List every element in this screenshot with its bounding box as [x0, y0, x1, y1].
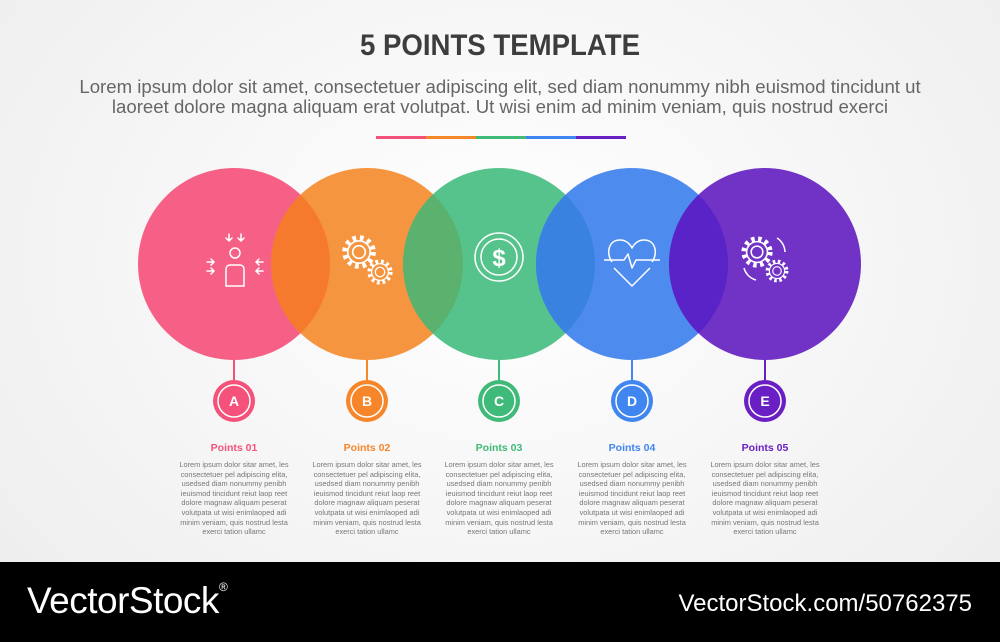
text column 5: Lorem ipsum dolor sitar amet, les consectetuer pel adipiscing elita, usedsed diam nonummy penibh ieuismod tincidunt reiut laop reet dolore magnaw aliquam peserat volutpata ut wisi enimlaoped adi minim veniam, quis nostrud lesta exerci tation ullamc — [710, 460, 820, 536]
text column 4: Points 04 — [609, 442, 655, 454]
circle 4 — [536, 168, 728, 360]
text column 1: Lorem ipsum dolor sitar amet, les consectetuer pel adipiscing elita, usedsed diam nonummy penibh ieuismod tincidunt reiut laop reet dolore magnaw aliquam peserat volutpata ut wisi enimlaoped adi minim veniam, quis nostrud lesta exerci tation ullamc — [179, 460, 289, 536]
title: 5 POINTS TEMPLATE — [360, 29, 640, 62]
badge B — [346, 380, 388, 422]
circle 5 — [669, 168, 861, 360]
text column 5: Points 05 — [742, 442, 788, 454]
badge E: E — [760, 393, 770, 409]
circle 1 — [138, 168, 330, 360]
footer: VectorStock® — [27, 580, 227, 621]
text column 2: Points 02 — [344, 442, 390, 454]
icon: person with arrows — [207, 234, 263, 286]
text column 3: Lorem ipsum dolor sitar amet, les consectetuer pel adipiscing elita, usedsed diam nonummy penibh ieuismod tincidunt reiut laop reet dolore magnaw aliquam peserat volutpata ut wisi enimlaoped adi minim veniam, quis nostrud lesta exerci tation ullamc — [444, 460, 554, 536]
badge D: D — [627, 393, 637, 409]
badge B: B — [362, 393, 372, 409]
icon: heart pulse — [604, 240, 660, 286]
text column 1: Points 01 — [211, 442, 257, 454]
icon: dollar coin — [475, 233, 523, 281]
subtitle: Lorem ipsum dolor sit amet, consectetuer adipiscing elit, sed diam nonummy nibh euismod tincidunt ut — [79, 76, 921, 97]
subtitle — [79, 76, 921, 117]
footer — [0, 562, 1000, 642]
badge C: C — [494, 393, 504, 409]
badge A — [213, 380, 255, 422]
overlaps — [271, 194, 728, 334]
circle 3 — [403, 168, 595, 360]
text column 4: Lorem ipsum dolor sitar amet, les consectetuer pel adipiscing elita, usedsed diam nonummy penibh ieuismod tincidunt reiut laop reet dolore magnaw aliquam peserat volutpata ut wisi enimlaoped adi minim veniam, quis nostrud lesta exerci tation ullamc — [577, 460, 687, 536]
icon: dollar coin: $ — [492, 245, 506, 272]
badge D — [611, 380, 653, 422]
color bar — [376, 136, 626, 139]
connector lines — [234, 355, 765, 382]
badge E — [744, 380, 786, 422]
text column 2: Lorem ipsum dolor sitar amet, les consectetuer pel adipiscing elita, usedsed diam nonummy penibh ieuismod tincidunt reiut laop reet dolore magnaw aliquam peserat volutpata ut wisi enimlaoped adi minim veniam, quis nostrud lesta exerci tation ullamc — [312, 460, 422, 536]
text column 3: Points 03 — [476, 442, 522, 454]
circle 2 — [271, 168, 463, 360]
icon: gears — [345, 238, 390, 282]
badge C — [478, 380, 520, 422]
circles diagram — [138, 168, 861, 422]
footer: VectorStock.com/50762375 — [678, 590, 972, 617]
icon: gears cycle — [744, 238, 786, 280]
subtitle: laoreet dolore magna aliquam erat volutpat. Ut wisi enim ad minim veniam, quis nostrud exerci — [112, 96, 888, 116]
badge A: A — [229, 393, 239, 409]
